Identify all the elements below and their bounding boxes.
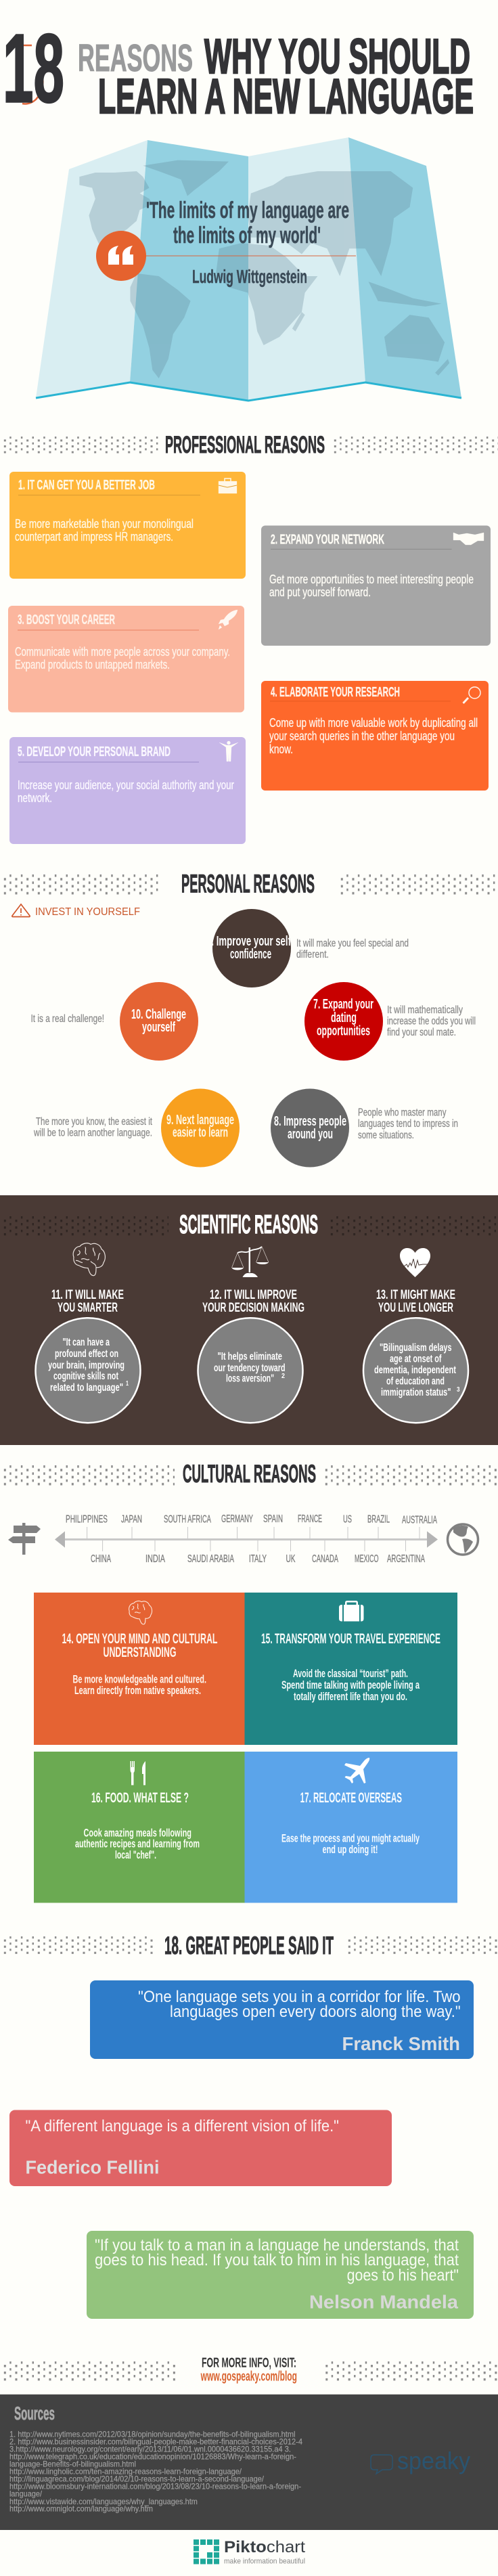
speaky logo: speaky xyxy=(397,2447,470,2474)
quote: Federico Fellini xyxy=(9,2110,392,2186)
icon: quote mark xyxy=(96,231,146,281)
quote: Franck Smith: languages open every doors along the way." xyxy=(170,2003,461,2021)
reason 7 text: It will mathematically xyxy=(387,1004,463,1016)
reason 9 circle: 9. Next language xyxy=(166,1113,234,1128)
reason 12 title xyxy=(202,1288,304,1315)
reason 13 quote bubble: "Bilingualism delays xyxy=(380,1342,452,1354)
reason 12 quote bubble: loss aversion" xyxy=(226,1373,274,1385)
reason 8 text: People who master many xyxy=(358,1107,447,1119)
heading: professional reasons: PROFESSIONAL REASONS xyxy=(165,432,325,458)
countries below the line: INDIA xyxy=(145,1553,165,1565)
panel: reason 3: Expand products to untapped markets. xyxy=(15,658,170,671)
reason 10 circle: yourself xyxy=(142,1020,175,1035)
reason 13 quote bubble: immigration status" xyxy=(381,1387,451,1398)
quote: Franck Smith: Franck Smith xyxy=(342,2033,460,2054)
number 18 xyxy=(3,14,64,123)
reason 8 circle: around you xyxy=(288,1127,333,1142)
sources list: 2. http://www.businessinsider.com/bilingual-people-make-better-financial-choices-2012-4 xyxy=(9,2437,302,2446)
reason 10 circle: 10. Challenge xyxy=(131,1007,186,1022)
reason 7 circle: opportunities xyxy=(317,1024,370,1039)
icon: brain xyxy=(73,1243,105,1276)
reason 8 text: languages tend to impress in xyxy=(358,1118,458,1130)
reason 13 quote bubble: 3 xyxy=(457,1386,460,1394)
quote text: the limits of my world' xyxy=(173,223,321,248)
countries below the line: CANADA xyxy=(312,1553,338,1565)
panel: reason 16: Cook amazing meals following xyxy=(84,1827,191,1840)
reason 10 text: It is a real challenge! xyxy=(31,1013,104,1025)
panel: reason 3 xyxy=(8,606,244,712)
sources list: http://www.vistawide.com/languages/why_languages.htm xyxy=(9,2497,198,2506)
quote: Franck Smith xyxy=(90,1980,474,2059)
wordmark: Piktochart xyxy=(224,2538,305,2556)
reason 6 text xyxy=(296,938,409,960)
reason 7 text xyxy=(387,1004,476,1038)
sources list: http://www.bloomsbury-international.com/blog/2013/08/23/10-reasons-to-learn-a-foreign- xyxy=(9,2482,301,2491)
sources list: http://www.lingholic.com/ten-amazing-reasons-learn-foreign-language/ xyxy=(9,2467,242,2477)
panel: reason 14: Learn directly from native speakers. xyxy=(74,1684,201,1697)
reason 13 title xyxy=(376,1288,455,1315)
panel: reason 1: 1. IT CAN GET YOU A BETTER JOB xyxy=(18,478,155,493)
sources heading: Sources xyxy=(14,2403,55,2424)
panel: reason 17: 17. RELOCATE OVERSEAS xyxy=(300,1790,402,1806)
countries below the line: SAUDI ARABIA xyxy=(187,1553,234,1565)
panel: reason 16: 16. FOOD. WHAT ELSE ? xyxy=(91,1790,189,1806)
subheading: invest in yourself: INVEST IN YOURSELF xyxy=(35,906,140,918)
countries below the line: MEXICO xyxy=(355,1553,379,1565)
heading: cultural reasons: CULTURAL REASONS xyxy=(183,1460,316,1488)
countries above the line: JAPAN xyxy=(121,1514,142,1526)
icon: heart with pulse xyxy=(400,1248,433,1277)
countries below the line: UK xyxy=(286,1553,296,1565)
panel: reason 1: Be more marketable than your monolingual xyxy=(15,517,194,531)
quote: Nelson Mandela: goes to his head. If you talk to him in his language, that xyxy=(95,2251,459,2269)
reason 12 quote bubble: 2 xyxy=(281,1373,285,1380)
panel: reason 15 xyxy=(245,1593,457,1745)
heading: scientific reasons: SCIENTIFIC REASONS xyxy=(179,1210,318,1239)
reason 9 circle xyxy=(161,1088,240,1167)
quote: Nelson Mandela: "If you talk to a man in a language he understands, that xyxy=(95,2236,459,2255)
title xyxy=(3,14,474,124)
sources list: language/ xyxy=(9,2489,43,2499)
countries below the line: ITALY xyxy=(249,1553,267,1565)
number 18: 18 xyxy=(3,14,64,123)
reason 6 text: different. xyxy=(296,949,329,960)
sources list xyxy=(9,2429,302,2514)
piktochart logo xyxy=(194,2538,305,2565)
panel: reason 14: Be more knowledgeable and cultured. xyxy=(73,1673,206,1685)
countries below the line: ARGENTINA xyxy=(387,1553,425,1565)
heading: professional reasons xyxy=(0,432,498,458)
call to action: more info: www.gospeaky.com/blog xyxy=(200,2369,297,2384)
panel: reason 5: 5. DEVELOP YOUR PERSONAL BRAND xyxy=(18,745,171,759)
heading: personal reasons xyxy=(0,870,498,899)
sources list: http://www.telegraph.co.uk/education/educationopinion/10126883/Why-learn-a-foreign- xyxy=(9,2451,296,2461)
sources list: http://linguagreca.com/blog/2014/02/10-reasons-to-learn-a-second-language/ xyxy=(9,2474,265,2484)
quote: Nelson Mandela: goes to his heart" xyxy=(347,2267,459,2285)
panel: scientific reasons xyxy=(0,1195,498,1445)
panel: reason 14: 14. OPEN YOUR MIND AND CULTURAL xyxy=(62,1631,218,1647)
panel: reason 17: Ease the process and you might actually xyxy=(281,1831,420,1844)
call to action: more info xyxy=(0,2355,498,2384)
icon: handshake xyxy=(453,533,484,545)
panel: sources xyxy=(0,2395,498,2530)
reason 7 circle xyxy=(304,982,383,1061)
reason 9 text: The more you know, the easiest it xyxy=(36,1116,152,1128)
icon: rocket xyxy=(219,610,237,629)
countries above the line: BRAZIL xyxy=(367,1514,390,1526)
sources list: 1. http://www.nytimes.com/2012/03/18/opinion/sunday/the-benefits-of-bilingualism.html xyxy=(9,2429,295,2439)
panel: reason 3: 3. BOOST YOUR CAREER xyxy=(18,613,115,627)
reason 13 quote bubble xyxy=(363,1318,468,1423)
reason 7 circle: 7. Expand your xyxy=(313,997,374,1012)
country timeline xyxy=(55,1513,438,1565)
icon: brain outline xyxy=(129,1601,152,1624)
reason 6 text: It will make you feel special and xyxy=(296,938,409,949)
reason 9 text xyxy=(33,1116,152,1138)
sources list: 3.http://www.neurology.org/content/early/2013/11/06/01.wnl.0000436620.33155.a4 3. xyxy=(9,2444,291,2453)
icon: signpost xyxy=(8,1523,41,1555)
countries above the line: GERMANY xyxy=(221,1513,253,1525)
countries above the line: PHILIPPINES xyxy=(66,1514,108,1526)
panel: reason 4: 4. ELABORATE YOUR RESEARCH xyxy=(271,685,400,700)
icon: suitcase xyxy=(339,1601,364,1622)
arrow xyxy=(55,1531,438,1548)
tagline: make information beautiful xyxy=(224,2557,305,2565)
icon: scales xyxy=(231,1247,269,1277)
icon: globe xyxy=(448,1524,478,1555)
reason 13 title: 13. IT MIGHT MAKE xyxy=(376,1288,455,1302)
reason 11 quote bubble: 1 xyxy=(126,1380,129,1387)
countries above the line: SPAIN xyxy=(263,1513,283,1525)
sources list: http://www.omniglot.com/language/why.htm xyxy=(9,2504,153,2514)
reason 11 quote bubble: your brain, improving xyxy=(48,1360,124,1371)
reason 7 text: find your soul mate. xyxy=(387,1027,456,1038)
reason 11 quote bubble: profound effect on xyxy=(55,1348,118,1360)
panel: reason 2: and put yourself forward. xyxy=(269,585,371,599)
panel: reason 5: network. xyxy=(18,791,52,805)
quote: Franck Smith: "One language sets you in a corridor for life. Two xyxy=(138,1988,461,2006)
reason 11 quote bubble xyxy=(35,1318,141,1423)
reason 11 quote bubble: cognitive skills not xyxy=(53,1371,118,1382)
panel: reason 14 xyxy=(34,1593,245,1745)
reason 11 quote bubble: related to language" xyxy=(50,1382,123,1394)
countries above the line: AUSTRALIA xyxy=(402,1515,437,1526)
icon: magnifier xyxy=(463,687,480,703)
panel: reason 14: UNDERSTANDING xyxy=(103,1645,176,1660)
heading: personal reasons: PERSONAL REASONS xyxy=(181,870,315,899)
heading: scientific reasons xyxy=(0,1210,498,1239)
reason 11 title xyxy=(51,1288,124,1315)
quote text xyxy=(146,198,349,248)
quote author: Ludwig Wittgenstein xyxy=(192,266,307,287)
reason 9 circle: easier to learn xyxy=(173,1125,228,1140)
reason 6 circle xyxy=(206,909,291,987)
panel: reason 2 xyxy=(261,525,491,646)
reason 13 quote bubble: dementia, independent xyxy=(374,1364,456,1376)
reason 13 quote bubble: of education and xyxy=(386,1376,445,1387)
reason 12 title: YOUR DECISION MAKING xyxy=(202,1301,304,1315)
reason 12 title: 12. IT WILL IMPROVE xyxy=(210,1288,297,1302)
folded world map xyxy=(36,137,461,401)
panel: reason 16: local "chef". xyxy=(115,1848,156,1861)
panel: reason 16 xyxy=(34,1752,245,1903)
call to action: more info: FOR MORE INFO, VISIT: xyxy=(202,2355,296,2370)
reason 11 quote bubble: "It can have a xyxy=(62,1337,110,1348)
subheading: invest in yourself xyxy=(12,904,140,918)
icon: briefcase xyxy=(219,479,237,493)
panel: reason 2: 2. EXPAND YOUR NETWORK xyxy=(271,532,384,547)
icon: piktochart grid xyxy=(194,2539,219,2564)
quote: Federico Fellini: "A different language is a different vision of life." xyxy=(26,2117,339,2135)
reason 8 text xyxy=(358,1107,458,1141)
panel: reason 3: Communicate with more people across your company. xyxy=(15,645,230,659)
divider line xyxy=(146,255,356,257)
panel: reason 15: totally different life than you do. xyxy=(294,1690,407,1703)
sources list: language-Benefits-of-bilingualism.html xyxy=(9,2460,136,2469)
heading: cultural reasons xyxy=(0,1460,498,1488)
reason 6 circle: confidence xyxy=(230,947,271,962)
countries below the line: CHINA xyxy=(91,1553,111,1565)
panel: reason 16: authentic recipes and learning from xyxy=(75,1838,200,1850)
reason 7 circle: dating xyxy=(331,1011,357,1025)
panel: reason 5 xyxy=(9,737,246,844)
reason 12 quote bubble xyxy=(198,1318,303,1423)
quote text: 'The limits of my language are xyxy=(146,198,349,223)
panel: reason 4: know. xyxy=(269,742,293,756)
reason 8 circle xyxy=(271,1088,349,1167)
reason 13 quote bubble: age at onset of xyxy=(390,1354,442,1365)
word reasons: REASONS xyxy=(78,37,193,80)
reason 13 title: YOU LIVE LONGER xyxy=(378,1301,453,1315)
panel: reason 15: Avoid the classical “tourist” path. xyxy=(293,1667,408,1680)
reason 8 text: some situations. xyxy=(358,1130,414,1141)
panel: reason 5: Increase your audience, your social authority and your xyxy=(18,778,234,792)
panel: reason 15: Spend time talking with people living a xyxy=(281,1679,420,1691)
reason 11 title: 11. IT WILL MAKE xyxy=(51,1288,124,1302)
reason 12 quote bubble: our tendency toward xyxy=(214,1362,286,1374)
quote: Nelson Mandela xyxy=(87,2231,474,2319)
countries above the line: FRANCE xyxy=(298,1513,322,1525)
reason 9 text: will be to learn another language. xyxy=(33,1128,152,1138)
heading: great people said it xyxy=(0,1932,498,1959)
reason 10 circle xyxy=(120,982,198,1061)
panel: reason 1: counterpart and impress HR managers. xyxy=(15,530,173,543)
reason 11 title: YOU SMARTER xyxy=(58,1301,118,1315)
countries above the line xyxy=(66,1513,437,1526)
icon: airplane xyxy=(344,1758,369,1783)
quote: Nelson Mandela: Nelson Mandela xyxy=(309,2292,458,2313)
icon: fork and knife xyxy=(130,1761,145,1785)
countries above the line: SOUTH AFRICA xyxy=(164,1514,211,1526)
panel: reason 17 xyxy=(245,1752,457,1903)
heading: great people said it: 18. GREAT PEOPLE SAID IT xyxy=(164,1932,334,1959)
continents xyxy=(79,160,449,378)
reason 6 circle: 6. Improve your self xyxy=(206,934,291,949)
quote: Federico Fellini: Federico Fellini xyxy=(26,2156,160,2177)
reason 8 circle: 8. Impress people xyxy=(274,1114,346,1129)
icon: person xyxy=(219,741,238,761)
reason 12 quote bubble: "It helps eliminate xyxy=(218,1351,282,1362)
panel: reason 1 xyxy=(9,472,246,579)
panel: reason 4 xyxy=(261,681,489,791)
countries above the line: US xyxy=(343,1514,352,1526)
panel: reason 17: end up doing it! xyxy=(322,1843,378,1856)
countries below the line xyxy=(91,1553,425,1565)
